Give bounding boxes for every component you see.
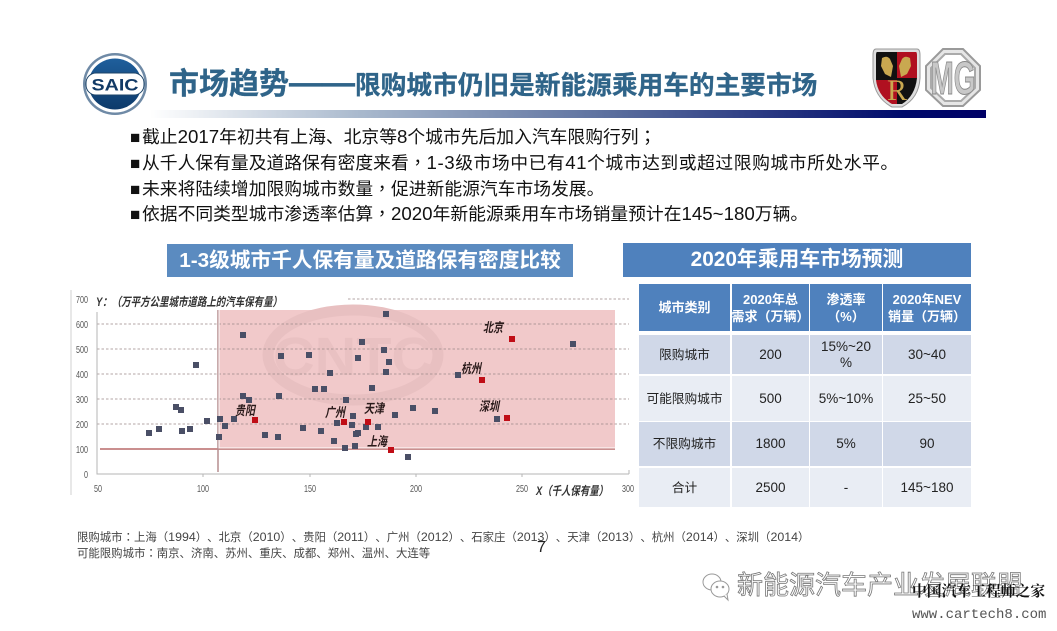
table: forecast: 限购城市 — [659, 348, 710, 362]
heading: chart — [167, 244, 573, 277]
scatter chart: 300 — [76, 394, 88, 406]
bullet list: ■ — [130, 205, 140, 224]
bullet list: ■ — [130, 180, 140, 199]
scatter chart: 深圳 — [479, 399, 501, 414]
scatter chart: 北京 — [483, 320, 505, 335]
table: forecast: 30~40 — [908, 346, 946, 362]
page number: 7 — [537, 539, 546, 556]
bullet list: ■ — [130, 154, 140, 173]
bullet list: 截止2017年初共有上海、北京等8个城市先后加入汽车限购行列； — [142, 126, 656, 147]
table: forecast: 500 — [759, 390, 782, 406]
logo: SAIC — [83, 53, 147, 115]
table: forecast: 5% — [836, 436, 856, 451]
footnote — [77, 530, 809, 560]
header bar — [150, 110, 986, 118]
table: forecast: 可能限购城市 — [646, 392, 723, 406]
table: forecast: 200 — [759, 346, 782, 362]
scatter chart: CNTC — [273, 327, 433, 387]
scatter chart: 700 — [76, 294, 88, 306]
table: forecast: 1800 — [755, 436, 786, 451]
bullet list — [130, 126, 899, 224]
scatter chart — [70, 290, 634, 498]
scatter chart: 600 — [76, 319, 88, 331]
scatter chart: Y：（万平方公里城市道路上的汽车保有量） — [96, 295, 282, 309]
footnote: 限购城市：上海（1994）、北京（2010）、贵阳（2011）、广州（2012）、石家庄（2013）、天津（2013）、杭州（2014）、深圳（2014） — [77, 530, 809, 544]
scatter chart: 杭州 — [461, 361, 483, 376]
scatter chart: 100 — [76, 444, 88, 456]
table: forecast — [639, 284, 971, 507]
logo: SAIC: SAIC — [92, 76, 138, 94]
title: 市场趋势——限购城市仍旧是新能源乘用车的主要市场 — [169, 64, 817, 101]
scatter chart: X（千人保有量） — [535, 484, 608, 498]
heading: forecast — [623, 243, 971, 277]
table: forecast: 合计 — [672, 480, 697, 494]
watermark: site name: 中国汽车工程师之家 — [912, 584, 1045, 600]
scatter chart: 250 — [516, 483, 528, 495]
scatter chart: 100 — [197, 483, 209, 495]
watermark: URL: www.cartech8.com — [912, 607, 1046, 623]
table: forecast: 145~180 — [901, 480, 953, 494]
table: forecast: 2500 — [755, 480, 786, 494]
bullet list: 未来将陆续增加限购城市数量，促进新能源汽车市场发展。 — [142, 179, 604, 199]
table: forecast: 90 — [919, 436, 935, 451]
footnote: 可能限购城市：南京、济南、苏州、重庆、成都、郑州、温州、大连等 — [77, 548, 430, 560]
scatter chart: 200 — [410, 483, 422, 495]
table: forecast: 2020年总 — [743, 292, 798, 306]
scatter chart: 500 — [76, 344, 88, 356]
icon: WeChat — [702, 574, 730, 602]
logo: Roewe shield: R — [887, 74, 907, 107]
scatter chart: 广州 — [325, 405, 347, 420]
table: forecast: 5%~10% — [819, 390, 873, 406]
heading: chart: 1-3级城市千人保有量及道路保有密度比较 — [179, 249, 561, 272]
table: forecast: 2020年NEV — [893, 292, 961, 306]
table: forecast: 销量（万辆） — [888, 308, 966, 324]
scatter chart: 上海 — [367, 434, 389, 449]
scatter chart: 150 — [304, 483, 316, 495]
scatter chart: 天津 — [364, 401, 386, 416]
scatter chart: 贵阳 — [235, 403, 257, 418]
table: forecast: （%） — [827, 308, 865, 324]
watermark: alliance name: 新能源汽车产业发展联盟 — [737, 570, 1023, 600]
table: forecast: 城市类别 — [658, 300, 710, 315]
scatter chart: 300 — [622, 483, 634, 495]
table: forecast: 需求（万辆） — [732, 308, 810, 324]
bullet list: 依据不同类型城市渗透率估算，2020年新能源乘用车市场销量预计在145~180万辆。 — [142, 203, 808, 224]
table: forecast: 渗透率 — [826, 292, 866, 306]
bullet list: 从千人保有量及道路保有密度来看，1-3级市场中已有41个城市达到或超过限购城市所处水平。 — [142, 152, 899, 173]
table: forecast: 25~50 — [908, 390, 946, 406]
scatter chart: 0 — [84, 469, 88, 481]
table: forecast: % — [840, 354, 852, 370]
logo: Roewe shield — [872, 48, 920, 108]
scatter chart: 400 — [76, 369, 88, 381]
scatter chart: 50 — [94, 483, 102, 495]
table: forecast: 不限购城市 — [653, 437, 716, 451]
heading: forecast: 2020年乘用车市场预测 — [691, 248, 903, 271]
table: forecast: 15%~20 — [821, 338, 871, 354]
scatter chart: 200 — [76, 419, 88, 431]
table: forecast: - — [844, 480, 848, 494]
bullet list: ■ — [130, 128, 140, 147]
